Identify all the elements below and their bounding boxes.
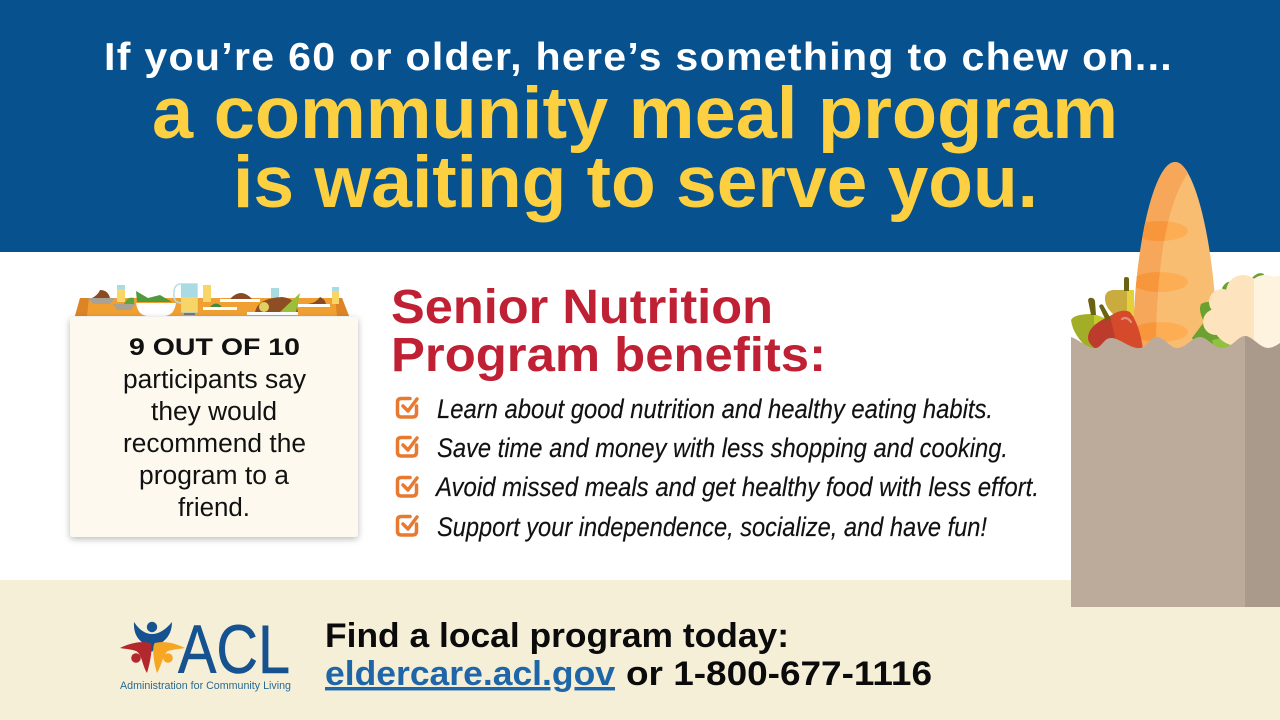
- heading: Senior Nutrition Program benefits: [391, 281, 826, 382]
- benefit 4: Support your independence, socialize, and have fun!: [437, 512, 988, 542]
- title highlight line 2: is waiting to serve you.: [233, 142, 1038, 223]
- benefit 3: Avoid missed meals and get healthy food with less effort.: [434, 472, 1039, 502]
- cauliflower: [1203, 275, 1280, 350]
- logo letters: ACL: [178, 611, 290, 688]
- title intro line: If you’re 60 or older, here’s something to chew on...: [104, 36, 1173, 79]
- statistic text: 9 OUT OF 10: [129, 334, 300, 361]
- benefits list: [398, 394, 1039, 542]
- table cloth: [75, 298, 349, 316]
- header band: [0, 0, 1280, 252]
- logo figures: [120, 622, 185, 673]
- phone number: or 1-800-677-1116: [626, 655, 932, 693]
- green pepper: [1071, 298, 1112, 350]
- statistic text: friend.: [178, 494, 250, 522]
- red pepper: [1088, 304, 1143, 350]
- greens: [1192, 273, 1264, 348]
- benefit 2: Save time and money with less shopping and cooking.: [437, 433, 1008, 463]
- baguette: [1132, 162, 1217, 350]
- statistic text: program to a: [139, 462, 290, 490]
- footer band: [0, 580, 1280, 720]
- website link: eldercare.acl.gov: [325, 655, 616, 693]
- call to action heading: Find a local program today:: [325, 617, 789, 655]
- dishes: [92, 290, 110, 298]
- statistic text: participants say: [123, 366, 306, 394]
- title highlight line 1: a community meal program: [152, 73, 1118, 154]
- call to action: [325, 617, 932, 693]
- icon: table of food: [75, 284, 349, 316]
- heading: Senior Nutrition Program benefits: Senior Nutrition: [391, 281, 773, 334]
- title: [104, 36, 1173, 223]
- icon: grocery bag: [1071, 162, 1280, 607]
- statistic text: they would: [151, 398, 277, 426]
- statistic text: recommend the: [123, 430, 306, 458]
- logo: ACL: [120, 611, 291, 692]
- benefit 1: Learn about good nutrition and healthy eating habits.: [437, 394, 993, 424]
- logo tagline: Administration for Community Living: [120, 680, 291, 692]
- heading: Senior Nutrition Program benefits: Program benefits:: [391, 329, 826, 382]
- card background: [70, 317, 358, 537]
- bag body: [1071, 336, 1280, 607]
- yellow pepper: [1105, 277, 1134, 325]
- statistic text: [123, 334, 306, 522]
- panel: statistic card: [70, 317, 358, 537]
